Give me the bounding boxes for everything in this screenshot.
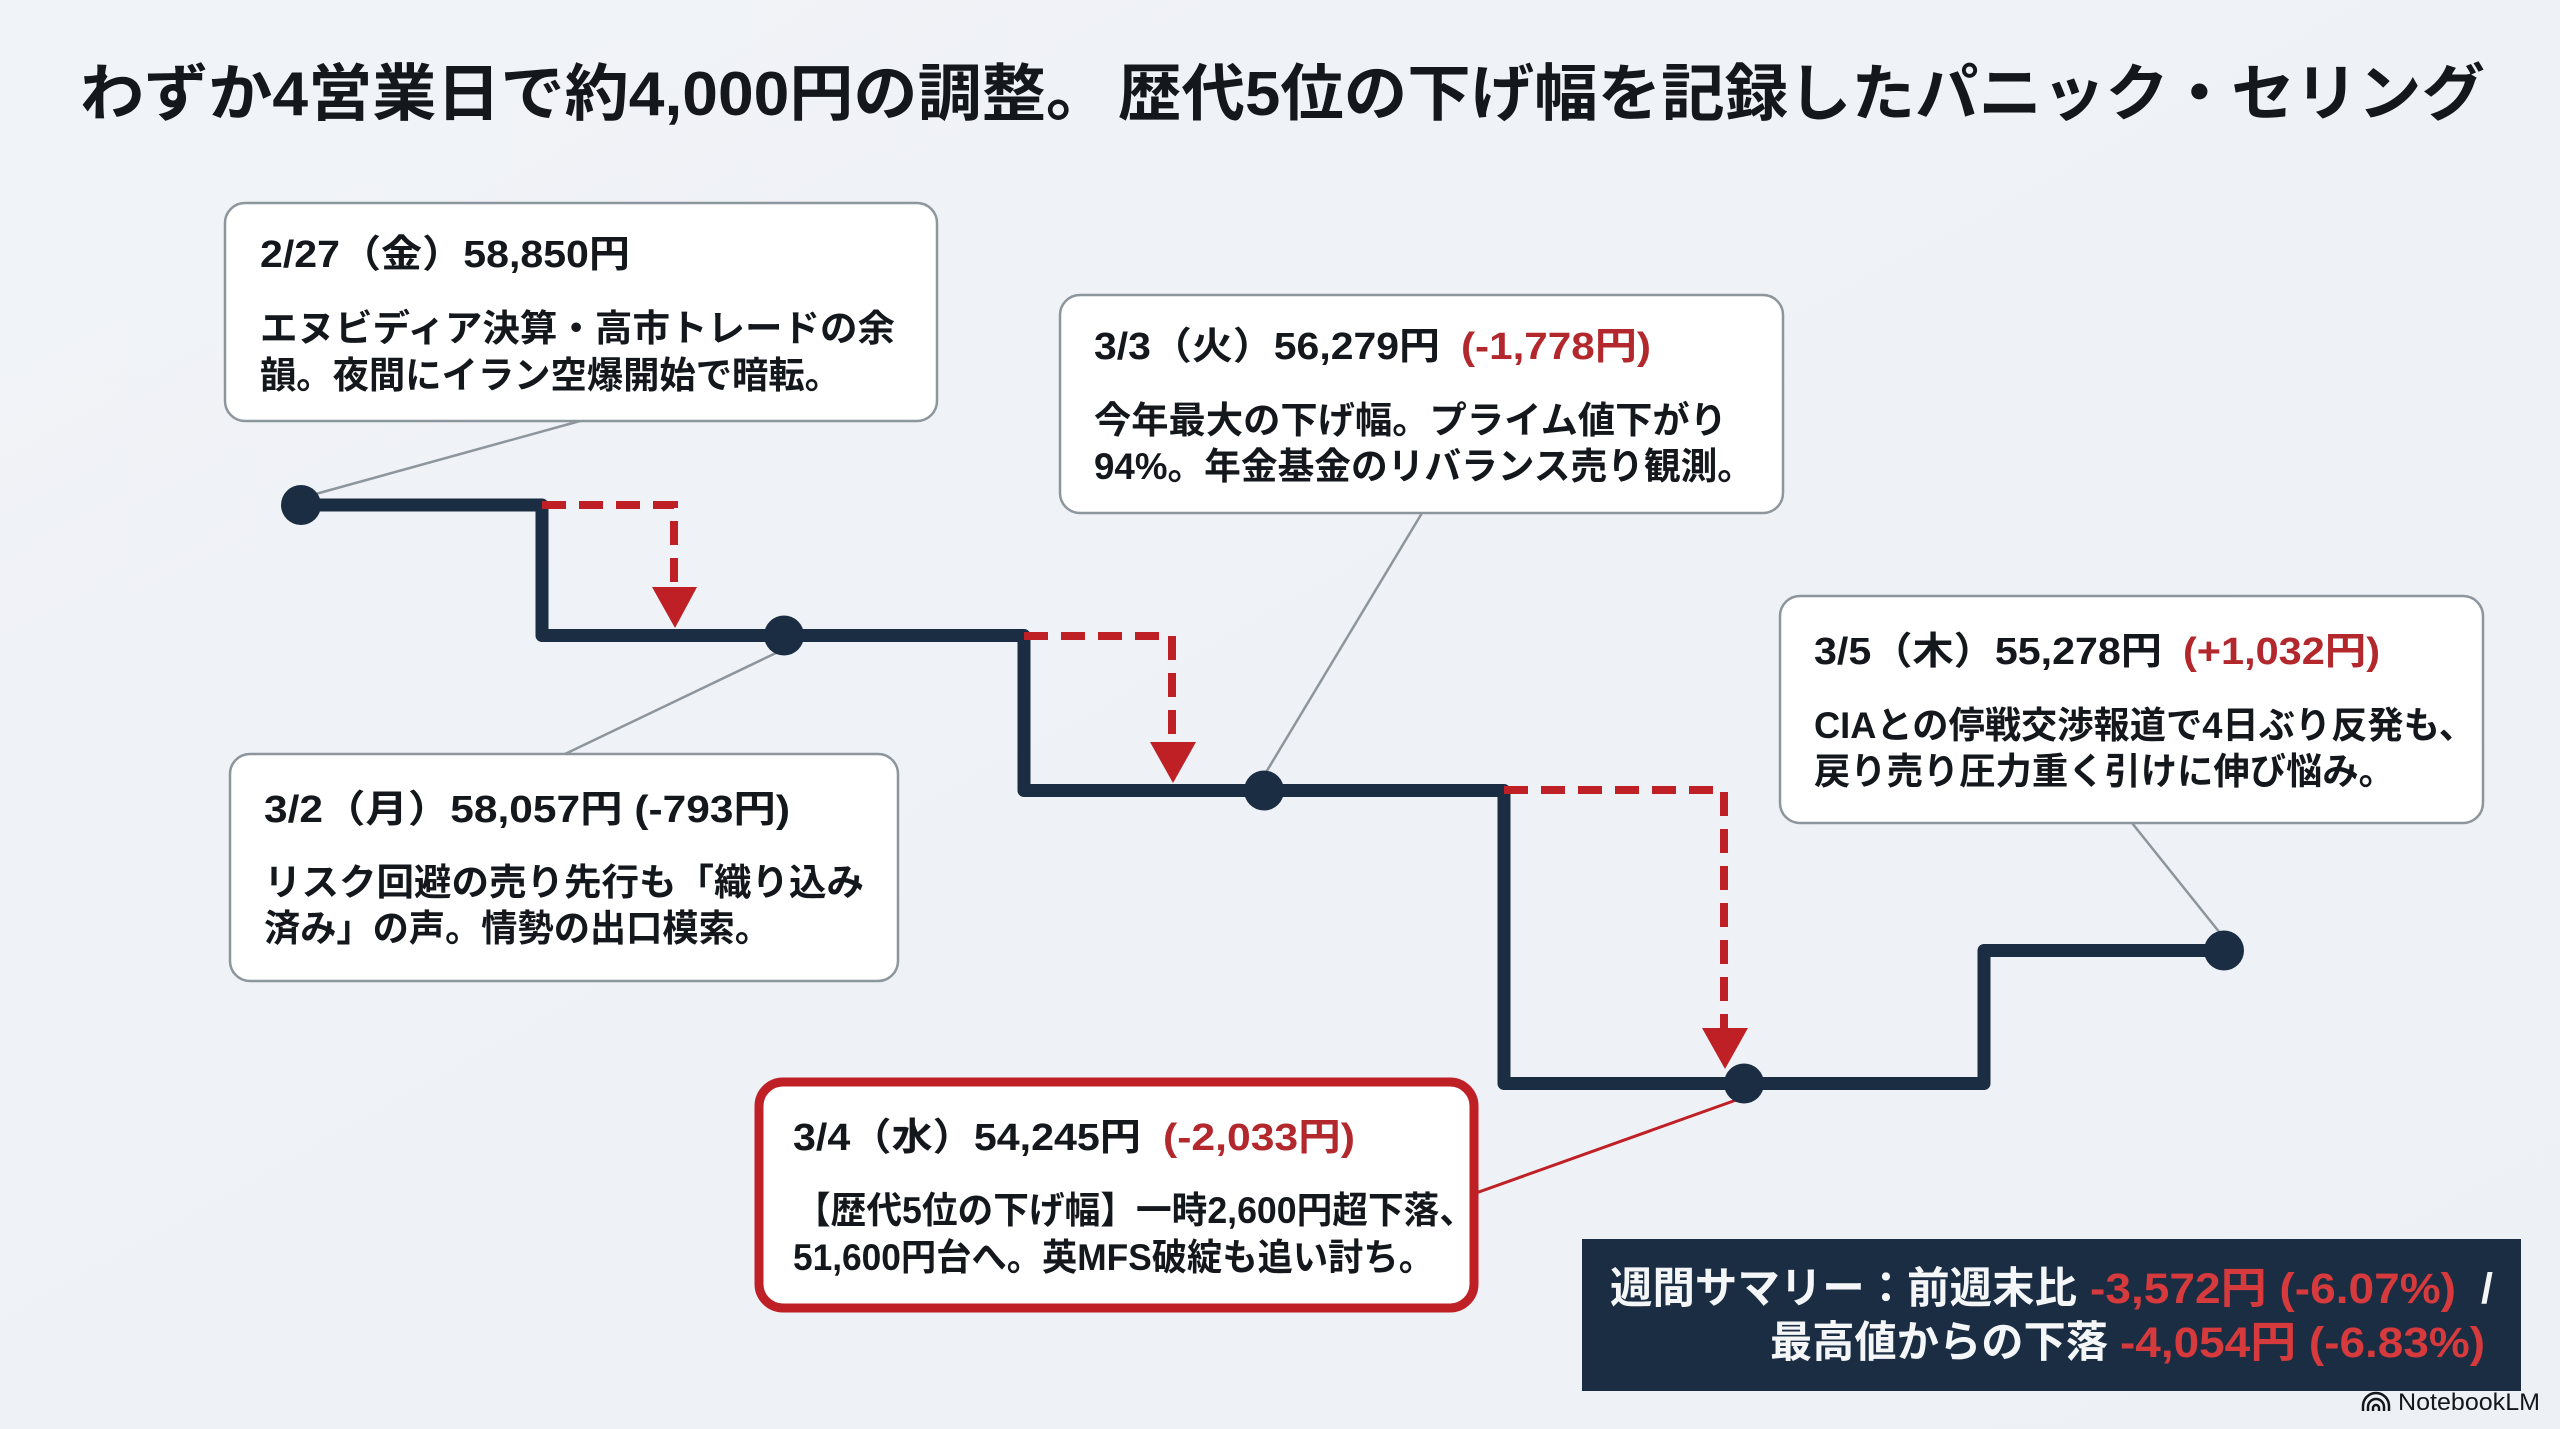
weekly summary panel: /: [2481, 1265, 2493, 1313]
callout: 3/5: (+1,032円): [2183, 631, 2380, 673]
callout: 2/27: エヌビディア決算・高市トレードの余: [260, 307, 895, 349]
callout: 2/27: 2/27（金）58,850円: [260, 234, 630, 276]
callout: 3/3: [1060, 295, 1783, 513]
callout: 3/2: 3/2（月）58,057円 (-793円): [264, 789, 790, 831]
weekly summary panel: 最高値からの下落: [1770, 1319, 2108, 1367]
callout: 2/27: [225, 203, 937, 421]
callout: 3/5: CIAとの停戦交渉報道で4日ぶり反発も、: [1814, 705, 2475, 746]
weekly summary panel: -3,572円 (-6.07%): [2090, 1265, 2456, 1313]
arrow: drop 3/3 to 3/4: [1504, 790, 1748, 1069]
callout: 3/3: (-1,778円): [1461, 326, 1651, 368]
callout: 3/3: 3/3（火）56,279円: [1094, 326, 1440, 368]
callout: 3/5: [1780, 596, 2483, 823]
connector lines: [312, 421, 2224, 1193]
title: [80, 60, 2485, 129]
callout: 3/2: リスク回避の売り先行も「織り込み: [264, 862, 864, 903]
callout: 3/5: 戻り売り圧力重く引けに伸び悩み。: [1814, 751, 2395, 792]
callout: 3/4 highlighted: 3/4（水）54,245円: [793, 1117, 1141, 1159]
title: 歴代5位の下げ幅を記録したパニック・セリング: [1118, 60, 2485, 129]
callout: 3/4 highlighted: 51,600円台へ。英MFS破綻も追い討ち。: [793, 1237, 1434, 1278]
callout: 3/4 highlighted: 【歴代5位の下げ幅】一時2,600円超下落、: [795, 1190, 1475, 1231]
callout: 3/5: 3/5（木）55,278円: [1814, 631, 2162, 673]
callout: 2/27: 韻。夜間にイラン空爆開始で暗転。: [260, 355, 841, 396]
callout: 3/3: 今年最大の下げ幅。プライム値下がり: [1094, 400, 1727, 441]
NotebookLM watermark: NotebookLM: [2398, 1389, 2540, 1416]
stepped price line chart: [281, 485, 2244, 1104]
title: わずか4営業日で約4,000円の調整。: [80, 60, 1110, 129]
weekly summary panel: [1582, 1239, 2521, 1391]
callout: 3/2: 済み」の声。情勢の出口模索。: [264, 908, 771, 949]
arrow: drop 3/2 to 3/3: [1024, 636, 1196, 783]
callout: 3/2: [230, 754, 898, 981]
weekly summary panel: -4,054円 (-6.83%): [2120, 1319, 2485, 1367]
weekly summary panel: 週間サマリー：前週末比: [1610, 1265, 2077, 1313]
callout: 3/4 highlighted: (-2,033円): [1163, 1117, 1355, 1159]
callout: 3/3: 94%。年金基金のリバランス売り観測。: [1094, 446, 1754, 487]
arrow: drop 2/27 to 3/2: [542, 505, 697, 628]
callout: 3/4 highlighted: [759, 1082, 1475, 1308]
